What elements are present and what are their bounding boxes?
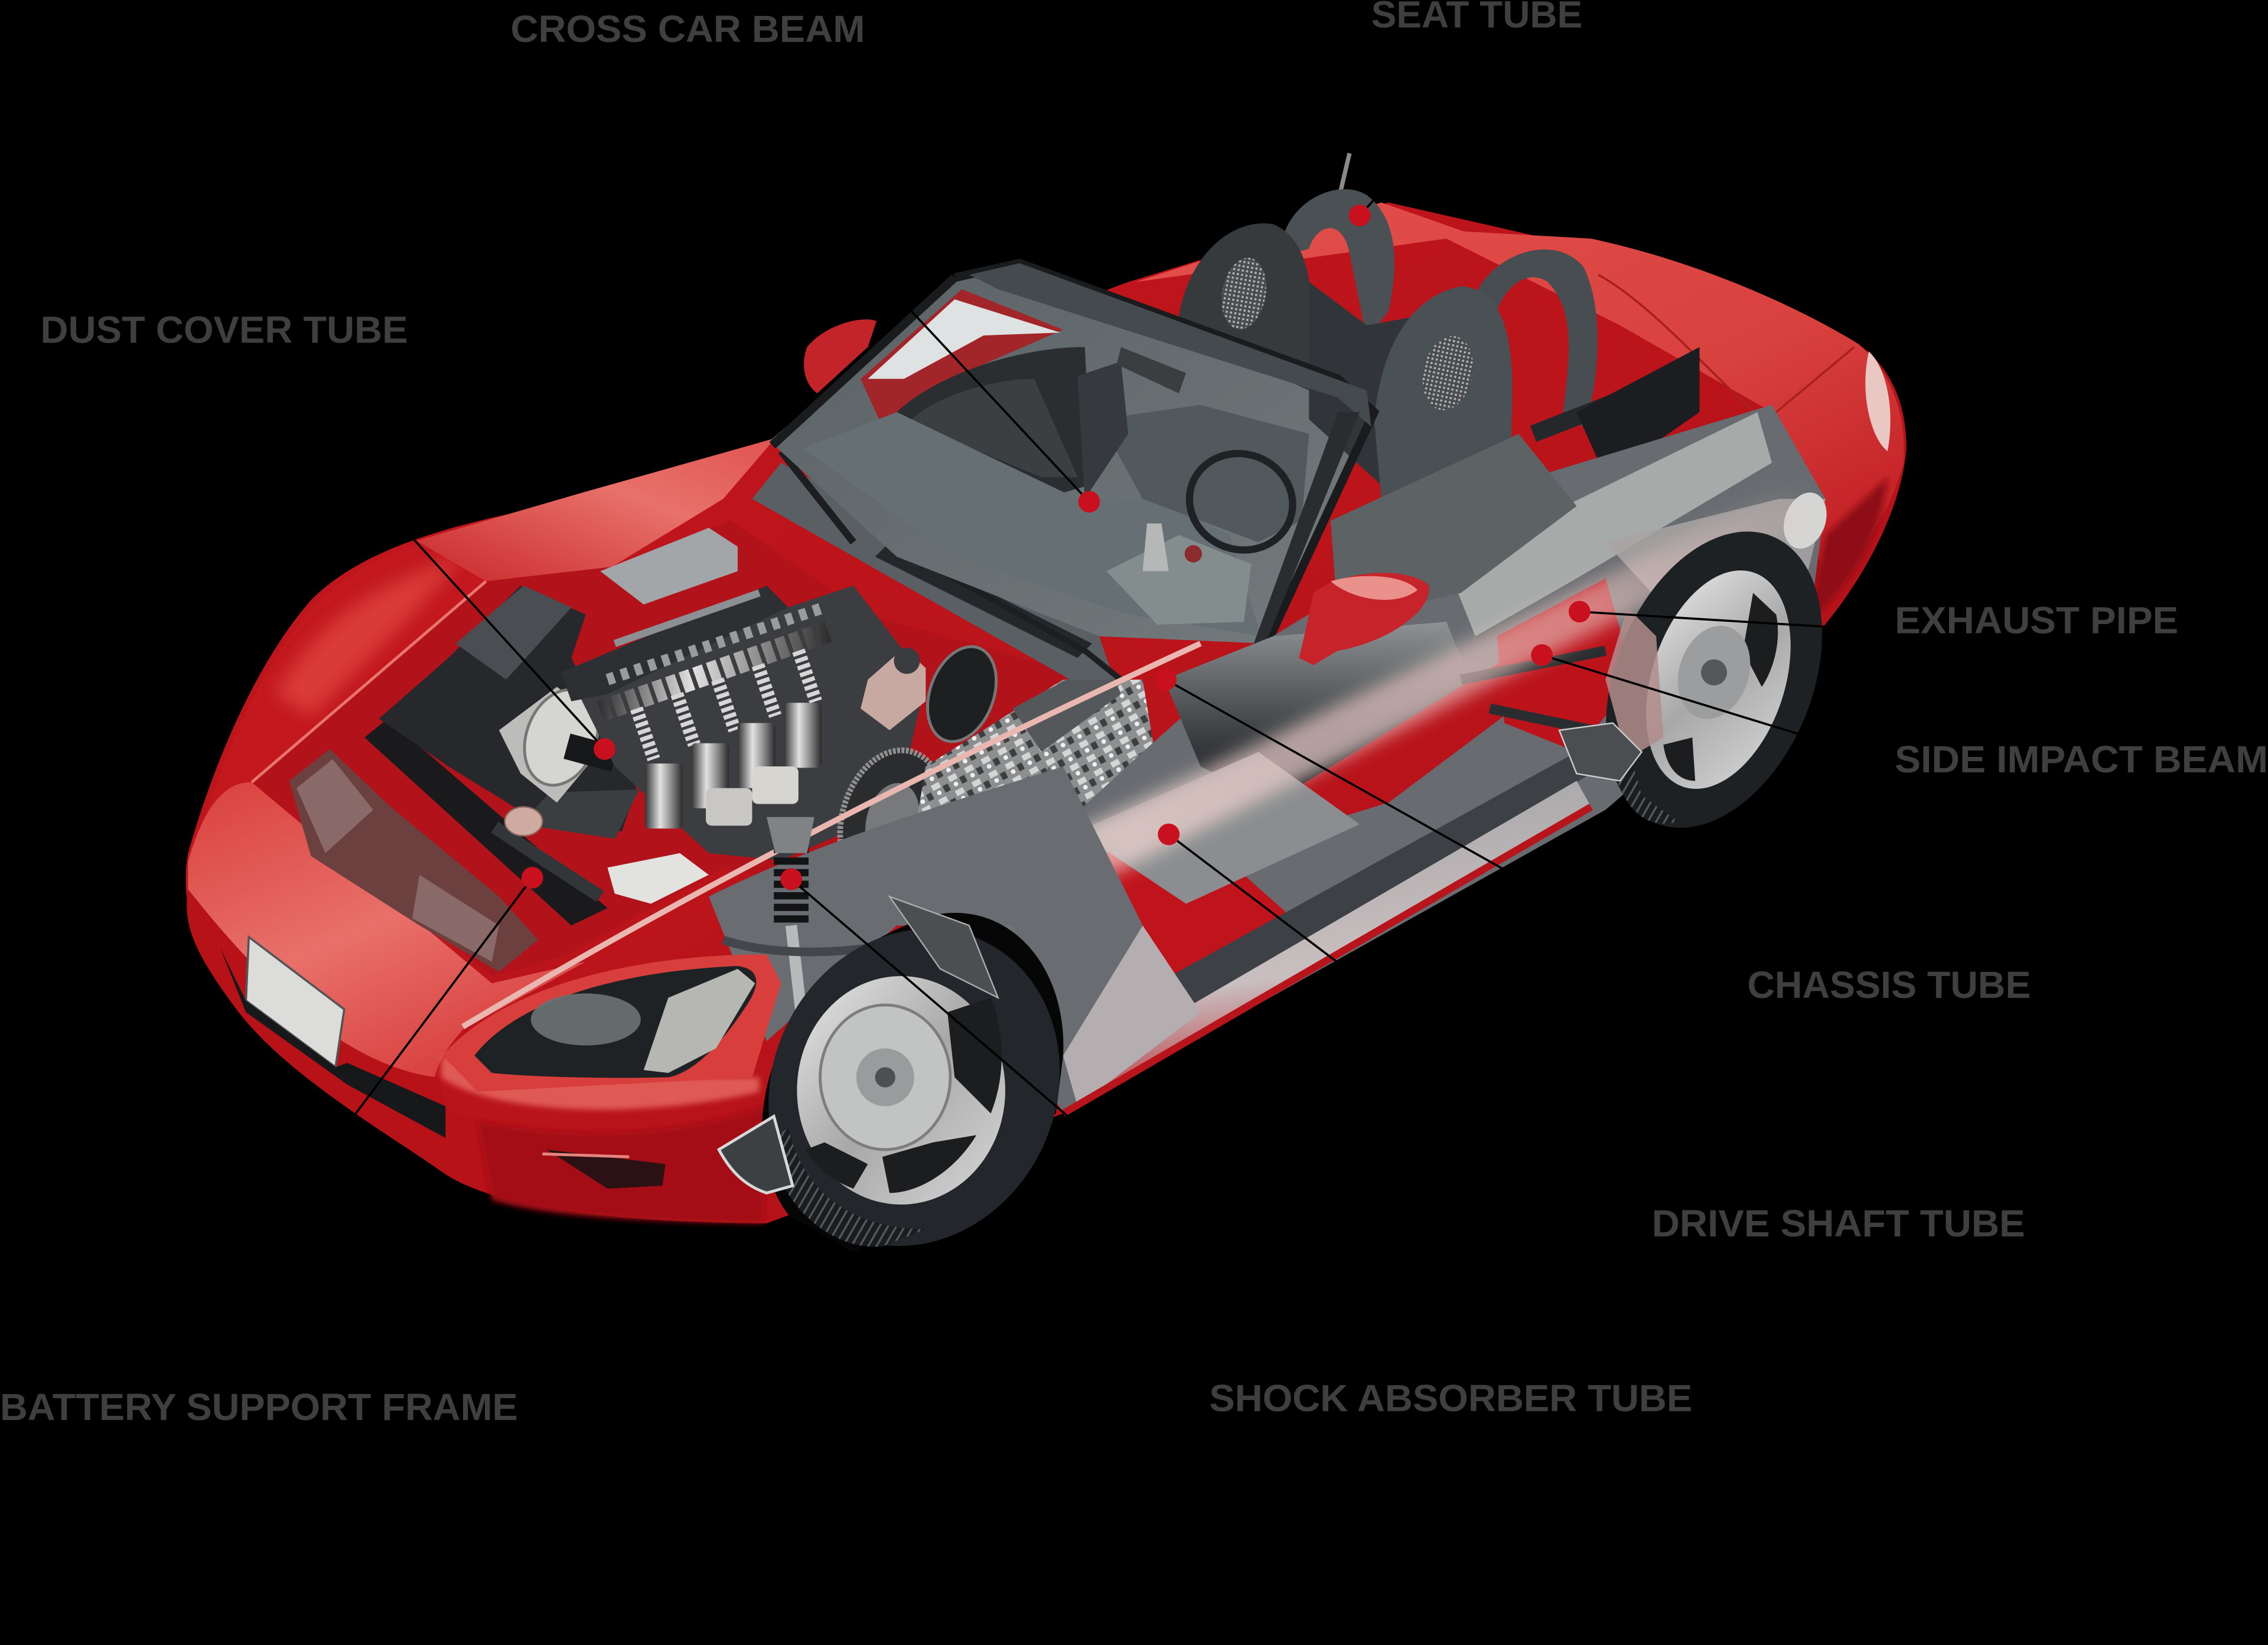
leader: chassis tube [1166, 680, 1707, 983]
muffler [1605, 499, 1826, 622]
second cam [608, 608, 825, 680]
piston 1 [706, 788, 752, 825]
deck lower shade [1808, 477, 1888, 622]
fuel tank [1164, 622, 1475, 802]
dot: seat tube [1349, 205, 1370, 226]
radiator window shade [296, 759, 499, 962]
sill red edge [1063, 807, 1591, 1114]
left mirror [804, 319, 876, 393]
battery [600, 528, 738, 605]
control arm [723, 940, 875, 952]
steering wheel [1176, 439, 1306, 564]
fender highlight [275, 557, 463, 716]
front rim [797, 976, 1005, 1205]
headlight lens [474, 966, 756, 1078]
pedal [1035, 766, 1092, 865]
exhaust tip [1776, 487, 1834, 554]
cam cover [561, 586, 788, 701]
camshaft row [600, 608, 832, 759]
cowl and wiper area [752, 451, 1121, 680]
cylinder 1 [645, 763, 683, 828]
intake streak [542, 1154, 629, 1157]
label: shock absorber tube: SHOCK ABSORBER TUBE [1209, 1378, 1692, 1419]
hood flap [416, 438, 775, 582]
wiper blade [897, 547, 1121, 680]
rear tyre [1565, 500, 1863, 860]
leader: shock absorber tube [791, 879, 1360, 1366]
shock spring [784, 846, 799, 925]
mid and rear underbody [954, 405, 1834, 1114]
label: cross car beam: CROSS CAR BEAM [510, 8, 865, 50]
flywheel [825, 739, 960, 905]
rear arch red [1497, 579, 1634, 752]
rear wheel [1559, 500, 1863, 860]
tail light [1865, 351, 1891, 451]
car body base [186, 203, 1907, 1223]
rear structure dark [1331, 434, 1576, 622]
headlight [442, 954, 781, 1092]
cylinder 3 [738, 723, 775, 788]
master cylinder [861, 648, 926, 730]
storage well [1576, 347, 1700, 477]
dot: side impact beam [1531, 644, 1553, 666]
rear hub cap [1701, 660, 1727, 686]
pillar [1251, 412, 1360, 651]
label: exhaust pipe: EXHAUST PIPE [1895, 600, 2178, 642]
dot: battery support frame [522, 867, 543, 889]
dashboard [803, 412, 1262, 637]
leader: drive shaft tube [1169, 834, 1642, 1193]
reservoir cap [894, 648, 920, 674]
mirror highlight [1331, 576, 1418, 600]
leader: side impact beam [1542, 655, 1881, 759]
trunk seam [1598, 275, 1855, 419]
cowl vent [875, 542, 1092, 658]
label: chassis tube: CHASSIS TUBE [1747, 964, 2031, 1006]
front fender translucent zone [709, 766, 1143, 1056]
chassis rail [1077, 752, 1360, 904]
header rail [969, 263, 1371, 426]
label: dust cover tube: DUST COVER TUBE [41, 309, 408, 351]
reflector 1 [531, 993, 641, 1046]
air box [379, 586, 637, 831]
air filter cone [499, 687, 593, 802]
inner sill [1157, 752, 1591, 1012]
hoop 1 [1280, 189, 1394, 340]
piston 2 [752, 766, 799, 804]
leader lines [167, 58, 1881, 1366]
front wheel [717, 881, 1111, 1294]
seat 1 back [1179, 223, 1312, 390]
console [1106, 535, 1251, 625]
front splash guard [719, 1117, 793, 1193]
door mirror [1299, 573, 1429, 665]
red floor upper [1273, 651, 1533, 831]
front door panel [1063, 925, 1201, 1106]
rear translucent bay [1446, 412, 1772, 637]
dark recess [889, 347, 1092, 499]
rear rim [1620, 552, 1817, 808]
lower bumper shade [477, 1106, 767, 1223]
air box lid [521, 789, 639, 838]
recess shade [911, 379, 1077, 477]
wiper arm [781, 451, 853, 542]
bumper highlight [441, 1056, 760, 1109]
flywheel hub [857, 777, 928, 866]
dot: dust cover tube [594, 738, 615, 760]
seat base [1099, 405, 1309, 542]
front wheel liner [889, 896, 998, 998]
red sill through glass [861, 289, 1063, 426]
leader: battery support frame [167, 878, 532, 1366]
cylinder 2 [692, 743, 729, 808]
marker dots [522, 205, 1591, 890]
seat 2 back [1374, 286, 1513, 579]
rear rim gaps [1663, 593, 1778, 781]
seat belt column [1077, 361, 1128, 499]
rear splash guard [1559, 723, 1642, 781]
rear tread [1613, 745, 1678, 824]
label: side impact beam: SIDE IMPACT BEAM [1895, 739, 2268, 781]
dot: shock absorber tube [780, 869, 802, 890]
brake booster [915, 637, 1009, 751]
transmission [911, 680, 1157, 896]
reflector 2 [644, 969, 755, 1073]
leader: seat tube [1360, 58, 1504, 216]
bay rim [252, 582, 486, 782]
fog intake [547, 1150, 666, 1189]
coolant reservoir [608, 853, 709, 904]
illustration: cutaway sports car [186, 154, 1907, 1294]
red floor lower [1077, 817, 1309, 998]
front arch red [788, 925, 926, 1041]
rear hub [1666, 616, 1762, 729]
air box top ribs [455, 586, 571, 680]
leader: cross car beam [713, 99, 1089, 502]
roll bar tube [1533, 373, 1689, 434]
engine block background [571, 586, 926, 860]
label: battery support frame: BATTERY SUPPORT FRAME [0, 1386, 518, 1428]
leader: dust cover tube [268, 379, 605, 749]
seat 2 mesh [1416, 331, 1480, 415]
front tyre [717, 881, 1111, 1294]
coolant pipe [495, 827, 600, 896]
shock rod [791, 925, 803, 1027]
antenna [1338, 154, 1350, 203]
front disc [820, 1005, 950, 1150]
engine bay [252, 521, 1157, 976]
intake hose [567, 746, 615, 759]
nose panel [188, 782, 586, 1092]
door translucent band [926, 484, 1815, 925]
front fascia and hood sides [187, 521, 767, 1223]
dot: chassis tube [1155, 669, 1177, 690]
hoop 2 [1472, 249, 1598, 426]
rear caliper and spring [1605, 608, 1663, 759]
radiator cap [505, 807, 542, 836]
suspension arm [1461, 651, 1627, 737]
front hub [856, 1049, 914, 1106]
front hub cap [875, 1067, 895, 1088]
bumper slot [220, 947, 445, 1138]
dot: drive shaft tube [1158, 824, 1179, 845]
outer sill [1063, 781, 1591, 1114]
pink fender line [463, 644, 1201, 1027]
radiator window [289, 749, 538, 972]
rim gaps [806, 998, 1002, 1193]
wheel arch [762, 913, 1063, 1252]
rear deck [1135, 203, 1904, 622]
cylinder 4 [784, 703, 822, 768]
seat 1 mesh [1216, 254, 1272, 333]
filter ring [511, 680, 611, 795]
license plate [246, 937, 344, 1067]
radiator bar [364, 719, 608, 925]
center panel [1309, 282, 1446, 492]
leader: exhaust pipe [1579, 612, 1863, 629]
valves [637, 651, 816, 759]
label: drive shaft tube: DRIVE SHAFT TUBE [1652, 1203, 2025, 1245]
rear view mirror [1117, 347, 1186, 393]
front tread [767, 1128, 926, 1247]
dot: cross car beam [1078, 491, 1100, 513]
lower bumper [187, 889, 767, 1223]
cam cover highlight [615, 593, 760, 644]
windshield and interior [770, 263, 1371, 644]
pedal box [1012, 658, 1121, 752]
dot: exhaust pipe [1569, 601, 1591, 622]
seats and roll hoops [1179, 189, 1700, 579]
shift lever [1143, 524, 1169, 571]
bright glass reflection [868, 299, 1060, 379]
shift button [1185, 545, 1202, 563]
windshield frame [773, 263, 1374, 651]
shock upper [767, 817, 814, 853]
